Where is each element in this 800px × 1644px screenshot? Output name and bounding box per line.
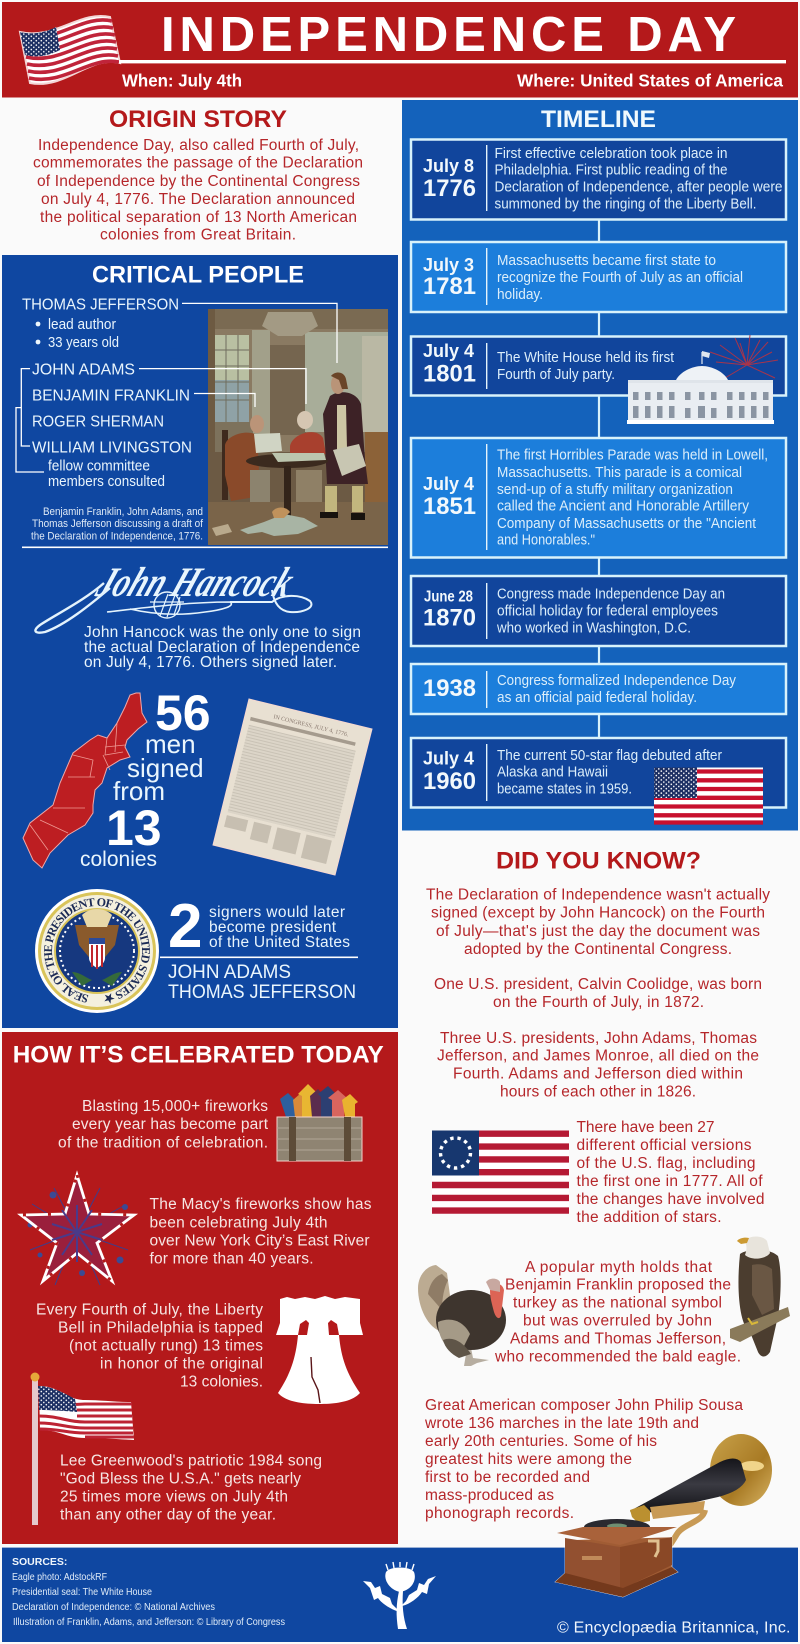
fact: Macy's fireworks: The Macy's fireworks show has	[150, 1196, 372, 1213]
timeline entry: 1851: Massachusetts. This parade is a comical	[497, 465, 742, 481]
text: origin story body: colonies from Great Britain.	[100, 227, 296, 244]
timeline entry: 1960: 1960	[423, 768, 476, 795]
stat: 2 signers became president: THOMAS JEFFERSON	[168, 982, 356, 1003]
fact: signing date: signed (except by John Hancock) on the Fourth	[431, 905, 765, 922]
fact: flag versions: the addition of stars.	[576, 1209, 722, 1226]
fact: Liberty Bell: in honor of the original	[100, 1356, 263, 1373]
fact: flag versions: of the U.S. flag, including	[576, 1155, 756, 1172]
timeline entry: 1781: July 3	[423, 254, 474, 275]
copyright: © Encyclopædia Britannica, Inc.	[557, 1620, 790, 1637]
fact: Sousa: Great American composer John Philip Sousa	[425, 1397, 743, 1414]
stat: 56 men signed from 13 colonies: men	[145, 729, 196, 759]
timeline entry: 1781: Massachusetts became first state to	[497, 253, 716, 269]
fact: three presidents: Fourth. Adams and Jefferson died within	[453, 1066, 743, 1083]
figure: Adams	[290, 432, 326, 454]
where label: Where: United States of America	[517, 70, 783, 90]
heading: timeline: TIMELINE	[541, 106, 656, 133]
fact: Sousa	[424, 1397, 743, 1522]
panel: how it's celebrated today	[2, 1032, 398, 1544]
timeline entry: 1960: Alaska and Hawaii	[497, 765, 608, 781]
stat: 56 men signed from 13 colonies: from	[113, 776, 165, 806]
timeline entry: 1851: Company of Massachusetts or the "Ancient	[497, 516, 756, 532]
timeline entry: 1801: July 4	[423, 340, 475, 361]
scattered papers	[240, 514, 318, 536]
fact: Lee Greenwood: than any other day of the year.	[60, 1506, 276, 1523]
timeline entry: 1870: official holiday for federal employees	[497, 604, 718, 620]
fact: fireworks: Blasting 15,000+ fireworks	[82, 1098, 268, 1115]
when label: When: July 4th	[122, 70, 242, 90]
icon: waving American flag	[20, 16, 120, 84]
text: committee members	[32, 362, 192, 490]
timeline entry: 1776: Declaration of Independence, after people were	[494, 180, 782, 196]
fact: Coolidge: on the Fourth of July, in 1872.	[493, 994, 704, 1011]
fact: Liberty Bell: (not actually rung) 13 times	[69, 1338, 263, 1355]
icon: phonograph	[555, 1434, 772, 1597]
fact: Macy's fireworks: for more than 40 years.	[150, 1251, 314, 1268]
fact: Lee Greenwood: 25 times more views on July 4th	[60, 1488, 288, 1505]
fact: fireworks: every year has become part	[72, 1116, 269, 1133]
text: committee members: ROGER SHERMAN	[32, 414, 164, 430]
caption: painting: Thomas Jefferson discussing a draft of	[32, 518, 204, 530]
caption: painting	[31, 506, 204, 542]
caption: painting: Benjamin Franklin, John Adams, and	[43, 506, 203, 518]
timeline entry: 1870: June 28	[424, 589, 473, 606]
timeline entry: 1960	[411, 738, 786, 808]
timeline entry: 1776: First effective celebration took place in	[494, 146, 728, 162]
timeline entry: 1870: Congress made Independence Day an	[497, 586, 725, 602]
timeline entry: 1870	[411, 576, 786, 646]
timeline entry: 1870: who worked in Washington, D.C.	[496, 620, 691, 636]
fact: Liberty Bell: Bell in Philadelphia is tapped	[58, 1320, 263, 1337]
sources: Presidential seal: The White House	[12, 1587, 152, 1598]
stat: 2 signers became president: signers would later	[209, 904, 345, 921]
text: origin story body: on July 4, 1776. The Declaration announced	[41, 191, 355, 208]
fact: turkey myth: but was overruled by John	[523, 1312, 712, 1330]
fact: flag versions: the first one in 1777. All of	[576, 1173, 763, 1190]
header banner	[2, 2, 798, 98]
stat: 56 men signed from 13 colonies: colonies	[80, 848, 157, 871]
icon: fireworks burst	[710, 335, 778, 378]
fact: Lee Greenwood: Lee Greenwood's patriotic 1984 song	[60, 1452, 322, 1469]
fact: flag versions: There have been 27	[576, 1119, 714, 1136]
text: origin story body: of Independence by the Continental Congress	[37, 173, 360, 190]
signature: John Hancock	[35, 559, 311, 633]
timeline entry: 1938: as an official paid federal holiday.	[497, 690, 697, 706]
sources: Declaration of Independence: © National Archives	[12, 1602, 215, 1613]
timeline entry: 1776	[411, 140, 786, 220]
icon: Britannica thistle	[363, 1562, 436, 1629]
fact: flag versions	[576, 1119, 764, 1226]
panel: critical people	[2, 255, 398, 1028]
timeline entry: 1851	[411, 438, 786, 558]
text: Thomas Jefferson	[22, 296, 179, 351]
timeline entry: 1960: became states in 1959.	[497, 781, 632, 797]
stat: 56 men signed from 13 colonies: signed	[127, 753, 204, 783]
heading: how it's celebrated today: HOW IT’S CELEBRATED TODAY	[13, 1042, 384, 1068]
timeline entry: 1851: called the Ancient and Honorable Artillery	[497, 499, 750, 515]
icon: Liberty Bell	[276, 1296, 363, 1404]
text: Thomas Jefferson: lead author	[48, 317, 116, 333]
text: Thomas Jefferson: THOMAS JEFFERSON	[22, 296, 179, 313]
stat: 2 signers became president	[160, 892, 358, 1003]
figure: Jefferson	[323, 392, 368, 484]
timeline entry: 1801	[411, 336, 786, 396]
document: Declaration of Independence: IN CONGRESS, JULY 4, 1776.	[273, 714, 349, 739]
fact: Sousa: phonograph records.	[425, 1505, 574, 1522]
timeline entry: 1776: Philadelphia. First public reading of the	[494, 163, 728, 179]
timeline entry: 1801: 1801	[423, 360, 476, 387]
fact: Sousa: first to be recorded and	[425, 1469, 590, 1486]
timeline entry: 1781: recognize the Fourth of July as an official	[497, 270, 743, 286]
stat: 56 men signed from 13 colonies: 56	[155, 685, 211, 741]
timeline entry: 1776: July 8	[423, 155, 474, 176]
stat: 2 signers became president: 2	[168, 892, 202, 961]
text: origin story body: commemorates the passage of the Declaration	[33, 155, 363, 172]
footer band	[2, 1548, 798, 1642]
heading: critical people: CRITICAL PEOPLE	[92, 261, 304, 288]
timeline entry: 1938: Congress formalized Independence Day	[497, 673, 737, 689]
fact: three presidents: Three U.S. presidents, John Adams, Thomas	[440, 1030, 757, 1047]
timeline entry: 1801: The White House held its first	[497, 350, 674, 366]
icon: flag on pole	[30, 1372, 134, 1525]
fact: Coolidge	[434, 976, 762, 1011]
fact: Sousa: mass-produced as	[425, 1487, 554, 1504]
fact: Macy's fireworks: been celebrating July 4th	[150, 1215, 328, 1232]
heading: origin story: ORIGIN STORY	[109, 106, 287, 133]
fact: Lee Greenwood	[60, 1452, 322, 1523]
panel: origin story	[33, 106, 363, 244]
icon: firework star	[21, 1175, 134, 1285]
text: origin story body: the political separation of 13 North American	[40, 209, 357, 226]
fact: flag versions: different official versions	[576, 1137, 752, 1154]
timeline entry: 1851: 1851	[423, 493, 476, 520]
fact: turkey myth: Benjamin Franklin proposed the	[505, 1276, 731, 1294]
text: committee members: WILLIAM LIVINGSTON	[32, 440, 192, 456]
fact: Sousa: early 20th centuries. Some of his	[425, 1433, 657, 1450]
panel: timeline	[402, 100, 798, 830]
text: Hancock fact: on July 4, 1776. Others signed later.	[84, 654, 337, 671]
icon: crate of fireworks	[277, 1084, 362, 1161]
fact: Liberty Bell: Every Fourth of July, the Liberty	[36, 1302, 263, 1319]
fact: signing date: The Declaration of Independence wasn't actually	[426, 887, 770, 904]
painting: Franklin, Adams and Jefferson	[208, 309, 388, 545]
signature: John Hancock: John Hancock	[89, 559, 301, 606]
fact: Macy's fireworks	[150, 1196, 372, 1268]
stat: 2 signers became president: become president	[209, 919, 337, 936]
fact: Lee Greenwood: "God Bless the U.S.A." gets nearly	[60, 1470, 301, 1487]
caption: painting: the Declaration of Independence, 1776.	[31, 530, 203, 542]
stat: 56 men signed from 13 colonies	[80, 685, 211, 871]
stat: 2 signers became president: of the United States	[209, 934, 350, 951]
timeline entry: 1851: July 4	[423, 473, 475, 494]
fact: turkey myth: Adams and Thomas Jefferson,	[510, 1331, 726, 1348]
fact: three presidents: Jefferson, and James Monroe, all died on the	[437, 1048, 759, 1065]
timeline entry: 1781	[411, 242, 786, 312]
fact: Macy's fireworks: over New York City’s East River	[150, 1233, 370, 1250]
fact: turkey myth: turkey as the national symbol	[513, 1294, 722, 1312]
timeline entry: 1960: July 4	[423, 748, 475, 769]
table	[246, 454, 328, 468]
text: Thomas Jefferson: 33 years old	[48, 335, 119, 351]
timeline entry: 1801: Fourth of July party.	[497, 367, 615, 383]
timeline entry: 1851: and Honorables."	[497, 532, 595, 548]
text: Hancock fact	[84, 624, 361, 671]
fact: Liberty Bell	[36, 1302, 263, 1391]
icon: first 13-star flag	[432, 1130, 569, 1214]
fact: three presidents: hours of each other in 1826.	[500, 1084, 696, 1100]
timeline entry: 1781: 1781	[423, 273, 476, 300]
seal of the president: SEAL OF THE PRESIDENT OF THE UNITED STATES ★	[44, 898, 150, 1004]
fact: signing date	[426, 887, 770, 958]
fact: turkey myth: who recommended the bald eagle.	[494, 1348, 741, 1365]
title: INDEPENDENCE DAY	[161, 8, 736, 62]
text: committee members: BENJAMIN FRANKLIN	[32, 388, 190, 404]
heading: did you know: DID YOU KNOW?	[496, 848, 701, 874]
fact: Sousa: wrote 136 marches in the late 19th and	[424, 1415, 699, 1432]
text: committee members: fellow committee	[48, 459, 150, 475]
fact: Coolidge: One U.S. president, Calvin Coolidge, was born	[434, 976, 762, 993]
timeline entry: 1776: summoned by the ringing of the Liberty Bell.	[494, 197, 756, 213]
text: origin story body: Independence Day, also called Fourth of July,	[38, 137, 359, 154]
leader lines	[16, 303, 337, 472]
text: committee members: JOHN ADAMS	[32, 362, 135, 379]
stat: 56 men signed from 13 colonies: 13	[106, 800, 162, 856]
document: Declaration of Independence	[213, 699, 372, 875]
text: committee members: members consulted	[48, 474, 165, 490]
sources	[12, 1556, 285, 1628]
panel: did you know	[418, 848, 790, 1522]
icon: bald eagle	[730, 1236, 790, 1356]
timeline entry: 1851: send-up of a stuffy military organization	[497, 482, 733, 498]
fact: flag versions: the changes have involved	[576, 1191, 764, 1208]
timeline entry: 1781: holiday.	[497, 287, 543, 303]
fact: fireworks: of the tradition of celebration.	[58, 1134, 268, 1152]
icon: 50-star flag	[654, 768, 763, 824]
figure: Franklin	[225, 433, 259, 501]
fact: three presidents	[437, 1030, 759, 1100]
stat: 2 signers became president: JOHN ADAMS	[168, 962, 291, 983]
timeline entry: 1870: 1870	[423, 604, 476, 631]
text: Hancock fact: the actual Declaration of Independence	[84, 639, 360, 656]
fact: signing date: adopted by the Continental Congress.	[464, 941, 732, 958]
text: Hancock fact: John Hancock was the only one to sign	[84, 624, 361, 641]
timeline entry: 1776: 1776	[423, 175, 476, 202]
sources: Illustration of Franklin, Adams, and Jefferson: © Library of Congress	[13, 1617, 285, 1628]
map: thirteen colonies	[23, 693, 147, 868]
fact: turkey myth: A popular myth holds that	[525, 1259, 713, 1276]
fact: fireworks	[58, 1098, 269, 1152]
icon: turkey	[418, 1265, 506, 1366]
sources: Eagle photo: AdstockRF	[12, 1572, 107, 1583]
fact: Sousa: greatest hits were among the	[425, 1451, 632, 1468]
fact: Liberty Bell: 13 colonies.	[180, 1374, 263, 1391]
timeline entry: 1960: The current 50-star flag debuted after	[497, 748, 722, 764]
text: origin story body	[33, 137, 363, 244]
timeline entry: 1938: 1938	[423, 675, 476, 702]
icon: White House	[627, 351, 774, 424]
timeline entry: 1851: The first Horribles Parade was held in Lowell,	[497, 448, 768, 464]
timeline entry: 1938	[411, 664, 786, 714]
fact: turkey myth	[494, 1259, 741, 1365]
sources: SOURCES:	[12, 1556, 67, 1568]
fact: signing date: of July—that's just the day the document was	[436, 923, 760, 940]
